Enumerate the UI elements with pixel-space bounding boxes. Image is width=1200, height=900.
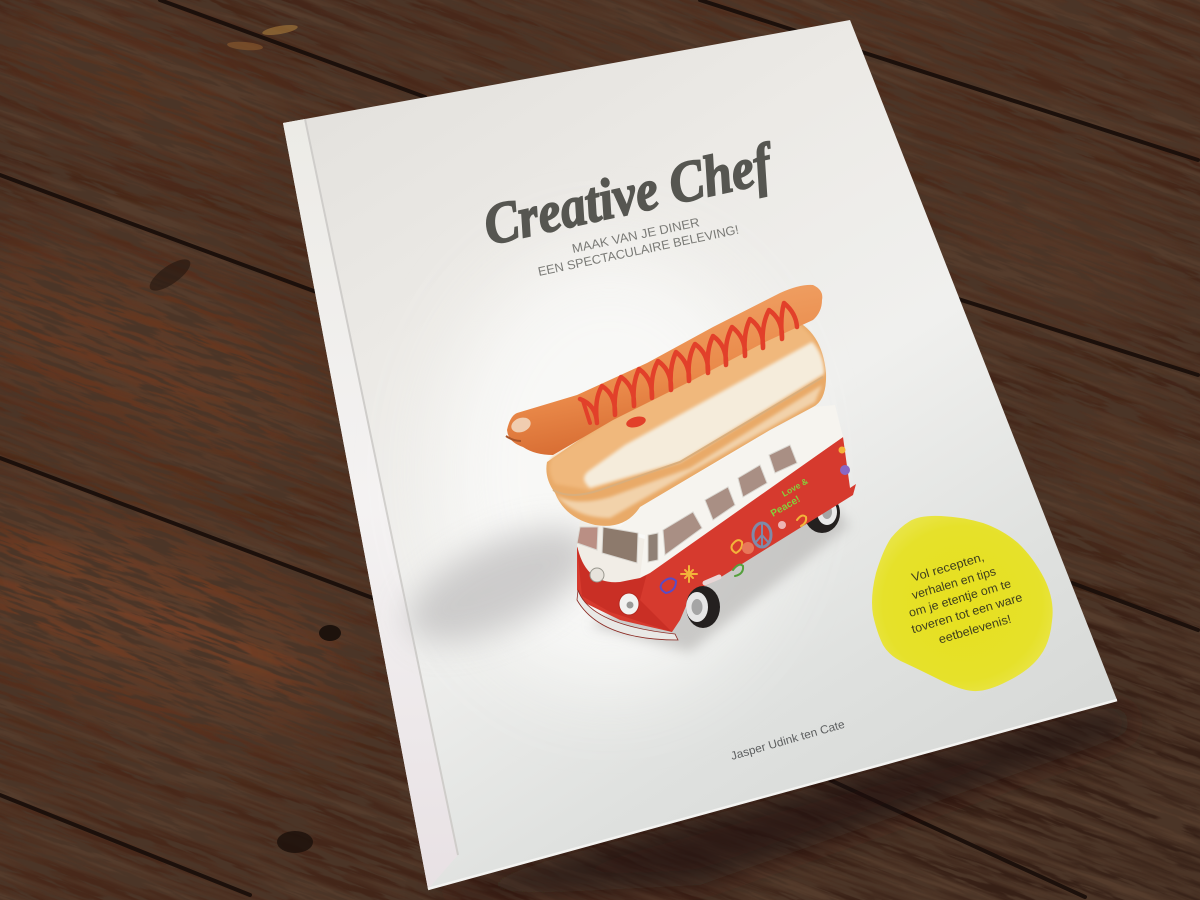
subtitle: MAAK VAN JE DINER (571, 215, 701, 256)
van bumper (577, 590, 678, 640)
book (283, 20, 1117, 889)
van front emblem (590, 568, 604, 582)
subtitle: EEN SPECTACULAIRE BELEVING! (537, 223, 740, 279)
title: Creative Chef (478, 130, 782, 258)
front wheel (686, 586, 720, 628)
callout text: om je etentje om te (907, 576, 1013, 620)
van lower body (577, 437, 856, 632)
book shadow (428, 703, 1140, 898)
van floor shadow (590, 495, 850, 652)
callout text: verhalen en tips (910, 564, 998, 602)
author: Jasper Udink ten Cate (730, 719, 846, 763)
sausage (506, 285, 822, 455)
illustration: van with hot dog (506, 285, 856, 652)
van upper white body (580, 405, 843, 578)
van lettering: Peace! (769, 494, 802, 520)
van lettering: Love & (780, 476, 810, 499)
book spine (283, 119, 458, 889)
van lettering (769, 476, 810, 520)
van windows (577, 445, 797, 563)
headlight (619, 593, 639, 615)
book cover (283, 20, 1117, 889)
callout text: eetbelevenis! (937, 612, 1013, 647)
van decorations (661, 446, 850, 593)
rear wheel (804, 493, 840, 533)
hot dog bun (546, 318, 826, 526)
bright lit area (440, 250, 780, 690)
callout text: toveren tot een ware (910, 590, 1024, 636)
callout text: Vol recepten, (910, 550, 986, 585)
yellow blob (872, 516, 1053, 691)
van white nose (577, 520, 648, 582)
yellow callout (872, 516, 1053, 691)
van shadow (392, 505, 608, 665)
callout text (907, 550, 1024, 647)
ketchup (580, 303, 797, 429)
